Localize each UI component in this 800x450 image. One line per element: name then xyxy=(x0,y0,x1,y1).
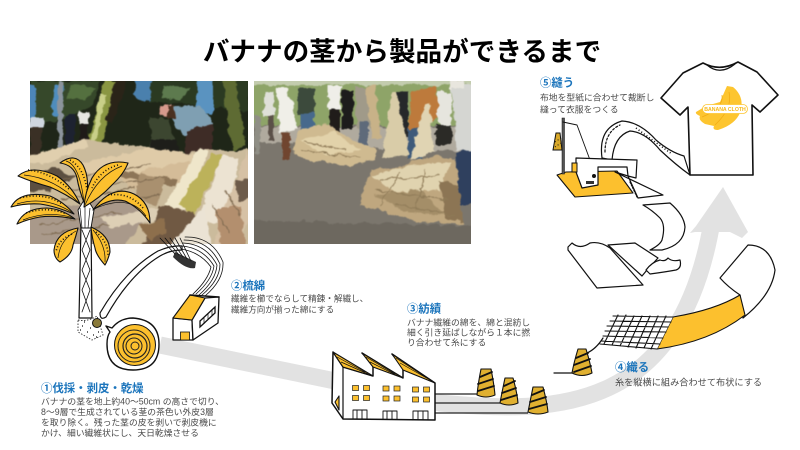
step 5 text: 縫って衣服をつくる xyxy=(540,104,619,114)
icon: thread spool and line xyxy=(554,338,603,376)
t-shirt illustration xyxy=(661,62,778,175)
step 1 text: を取り除く。残った茎の皮を剥いで剥皮機に xyxy=(41,416,217,428)
step 2 text: 繊維方向が揃った綿にする xyxy=(231,304,334,314)
step 4 text xyxy=(615,360,762,388)
icon: fibre cross-section bubble xyxy=(106,318,159,370)
step 1 text xyxy=(41,381,224,438)
step 4 text: 糸を縦横に組み合わせて布状にする xyxy=(615,376,762,388)
step 1 text: かけ、細い繊維状にし、天日乾燥させる xyxy=(41,427,199,438)
step 3 text: 細く引き延ばしながら１本に撚 xyxy=(407,326,530,338)
step 2 text: ②梳綿 xyxy=(231,278,265,292)
icon: banana tree xyxy=(11,158,150,340)
photo: bales of banana fibre xyxy=(254,81,471,244)
icon: woven cloth xyxy=(600,245,775,349)
icon: sewing machine xyxy=(553,118,663,198)
step 5 text xyxy=(540,76,654,114)
step 2 text xyxy=(231,278,368,314)
step 4 text: ④織る xyxy=(615,360,649,374)
step 1 text: 8～9層で生成されている茎の茶色い外皮3層 xyxy=(41,406,214,417)
step 3 text: バナナ繊維の綿を、綿と混紡し xyxy=(407,316,530,328)
banana logo: BANANA CLOTH xyxy=(704,107,746,113)
step 5 text: ⑤縫う xyxy=(540,76,574,90)
step 1 text: ①伐採・剥皮・乾燥 xyxy=(41,381,144,395)
icon: carding tube, comb and building xyxy=(100,237,223,340)
step 3 text: り合わせて糸にする xyxy=(407,336,486,348)
step 3 text xyxy=(407,302,530,348)
cut fabric pieces xyxy=(568,203,685,288)
stump xyxy=(78,316,103,340)
step 3 text: ③紡績 xyxy=(407,302,442,316)
fabric strip into sewing machine xyxy=(601,121,690,175)
icon: factory xyxy=(332,352,528,420)
step 5 text: 布地を型紙に合わせて裁断し xyxy=(540,92,654,102)
process arrow xyxy=(160,187,748,407)
step 2 text: 繊維を櫛でならして精錬・解繊し、 xyxy=(231,292,368,304)
photo: harvesting and stripping banana stems xyxy=(30,81,248,244)
icon: three yarn cones xyxy=(477,369,548,414)
step 1 text: バナナの茎を地上約40～50cm の高さで切り、 xyxy=(41,396,224,406)
title: バナナの茎から製品ができるまで xyxy=(203,37,601,67)
